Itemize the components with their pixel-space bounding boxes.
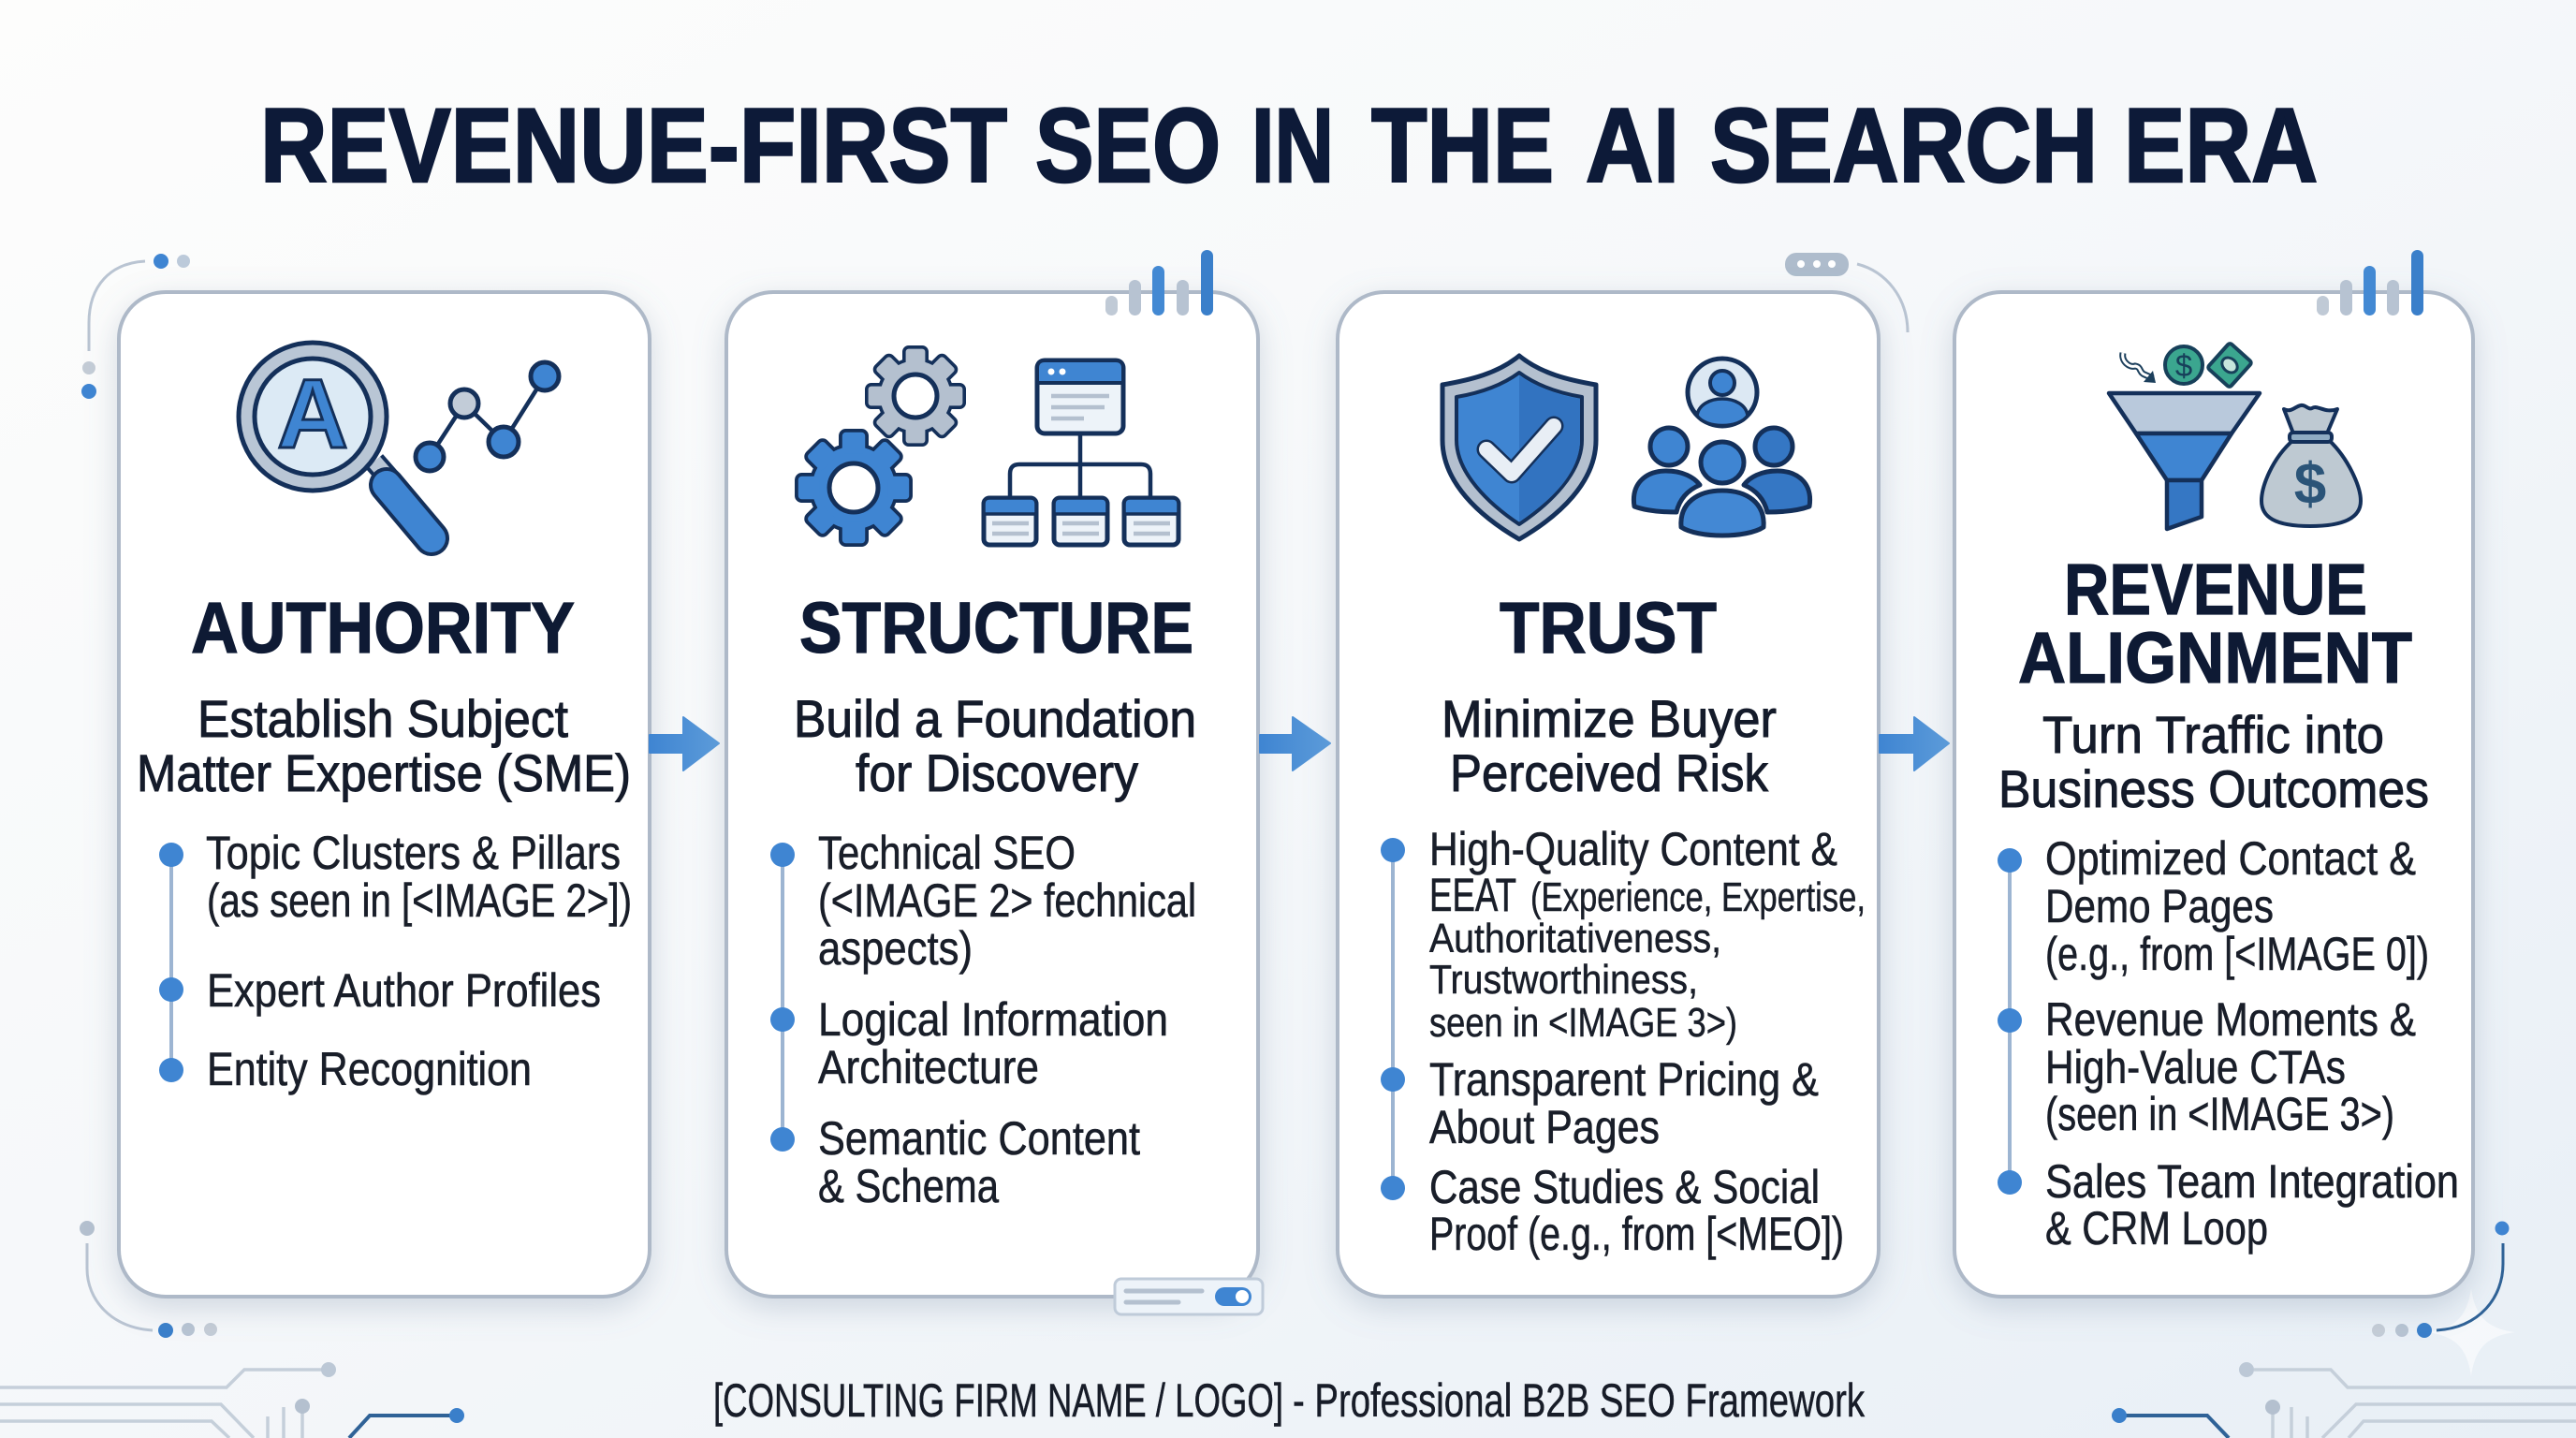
- bullet list: (as seen in [<IMAGE 2>]): [207, 874, 632, 927]
- decoration: toggle widget on structure card: [1115, 1279, 1263, 1314]
- title: AI: [1586, 87, 1679, 204]
- decoration: bars on structure card: [1105, 250, 1213, 315]
- bullet list: Trustworthiness,: [1429, 957, 1698, 1003]
- bullet list: & CRM Loop: [2045, 1202, 2268, 1255]
- heading: ALIGNMENT: [2018, 618, 2412, 698]
- bullet list: (Experience, Expertise,: [1530, 874, 1866, 920]
- icon: coins and arrow above funnel: [2123, 343, 2252, 388]
- bullet list: Revenue Moments &: [2045, 993, 2416, 1046]
- icon: people group: [1633, 359, 1810, 536]
- bullet list: Logical Information: [818, 993, 1168, 1046]
- bullet list: High-Value CTAs: [2045, 1041, 2346, 1093]
- bullet list: Expert Author Profiles: [207, 964, 601, 1017]
- footer: [CONSULTING FIRM NAME / LOGO]: [713, 1374, 1283, 1427]
- subtitle: for Discovery: [856, 743, 1138, 802]
- card background: [119, 292, 650, 1297]
- title: ERA: [2124, 87, 2318, 204]
- title: THE: [1371, 87, 1554, 204]
- footer: [713, 1374, 1866, 1427]
- subtitle: Matter Expertise (SME): [137, 743, 631, 802]
- icon: magnifier with letter A and trend line: A: [277, 360, 348, 469]
- subtitle: Minimize Buyer: [1442, 689, 1777, 748]
- bullet list: EEAT: [1429, 869, 1516, 921]
- arrow: authority to structure: [650, 717, 719, 770]
- bullet list: Authoritativeness,: [1429, 916, 1721, 961]
- subtitle: Business Outcomes: [1998, 759, 2429, 818]
- title: SEARCH: [1710, 87, 2098, 204]
- arrow: trust to revenue alignment: [1880, 717, 1949, 770]
- bullet list: & Schema: [818, 1160, 999, 1212]
- icon: funnel: [2109, 393, 2260, 529]
- subtitle: [137, 689, 631, 802]
- bullet list: Semantic Content: [818, 1112, 1140, 1165]
- heading: STRUCTURE: [799, 588, 1193, 668]
- heading: TRUST: [1500, 588, 1717, 668]
- bullet list: Topic Clusters & Pillars: [206, 827, 621, 879]
- subtitle: [1998, 705, 2429, 818]
- bullet list: [159, 827, 632, 1095]
- bullet list: aspects): [818, 922, 973, 975]
- bullet list: [1381, 823, 1866, 1260]
- heading: REVENUE: [2064, 550, 2367, 630]
- bullet list: (<IMAGE 2> fechnical: [818, 874, 1196, 927]
- subtitle: [1442, 689, 1777, 802]
- heading: AUTHORITY: [191, 588, 575, 668]
- bullet list: Technical SEO: [818, 827, 1076, 879]
- bullet list: High-Quality Content &: [1429, 823, 1837, 875]
- decoration: bottom-left circuit accent: [80, 1221, 217, 1338]
- decoration: bottom-left circuit traces: [0, 1362, 464, 1438]
- footer: - Professional B2B SEO Framework: [1293, 1374, 1866, 1427]
- bullet list: Case Studies & Social: [1429, 1161, 1820, 1213]
- title: REVENUE-FIRST: [260, 87, 1007, 204]
- decoration: bottom-right circuit accent: [2372, 1221, 2509, 1338]
- bullet list: Architecture: [818, 1041, 1039, 1093]
- bullet list: [1998, 832, 2459, 1255]
- bullet list: Proof (e.g., from [<MEO]): [1429, 1208, 1844, 1260]
- decoration: bottom-right sparkle: [2427, 1288, 2515, 1376]
- icon: site hierarchy: [984, 360, 1178, 545]
- decoration: top-left circuit accent: [81, 254, 190, 399]
- decoration: bars on revenue card: [2317, 250, 2423, 315]
- heading: [2018, 550, 2412, 698]
- title: IN: [1251, 87, 1334, 204]
- bullet list: [770, 827, 1196, 1212]
- panel: trust: [1338, 292, 1879, 1297]
- subtitle: [794, 689, 1196, 802]
- icon: shield with check: [1442, 356, 1596, 539]
- bullet list: Sales Team Integration: [2045, 1155, 2459, 1208]
- bullet list: Transparent Pricing &: [1429, 1053, 1819, 1106]
- bullet list: Optimized Contact &: [2045, 832, 2416, 885]
- panel: structure: [726, 292, 1258, 1297]
- decoration: bottom-right circuit traces: [2112, 1362, 2576, 1438]
- icon: coins and arrow above funnel: $: [2175, 348, 2192, 383]
- panel: authority: [119, 292, 650, 1297]
- icon: money bag: [2261, 405, 2361, 526]
- subtitle: Establish Subject: [198, 689, 568, 748]
- bullet list: Demo Pages: [2045, 880, 2274, 932]
- bullet list: (e.g., from [<IMAGE 0]): [2045, 928, 2429, 980]
- panel: revenue alignment: [1954, 292, 2473, 1297]
- title: SEO: [1035, 87, 1221, 204]
- card background: [726, 292, 1258, 1297]
- subtitle: Turn Traffic into: [2042, 705, 2384, 764]
- decoration: pill and arc above trust card: [1785, 253, 1908, 332]
- bullet list: About Pages: [1429, 1101, 1660, 1153]
- bullet list: seen in <IMAGE 3>): [1429, 1000, 1737, 1046]
- card background: [1954, 292, 2473, 1297]
- title: [260, 87, 2318, 204]
- arrow: structure to trust: [1260, 717, 1330, 770]
- icon: gears: [798, 349, 962, 543]
- bullet list: Entity Recognition: [207, 1043, 532, 1095]
- icon: magnifier with letter A and trend line: [239, 343, 559, 538]
- subtitle: Perceived Risk: [1450, 743, 1769, 802]
- icon: money bag: $: [2294, 452, 2326, 517]
- bullet list: (seen in <IMAGE 3>): [2045, 1088, 2394, 1140]
- card background: [1338, 292, 1879, 1297]
- subtitle: Build a Foundation: [794, 689, 1196, 748]
